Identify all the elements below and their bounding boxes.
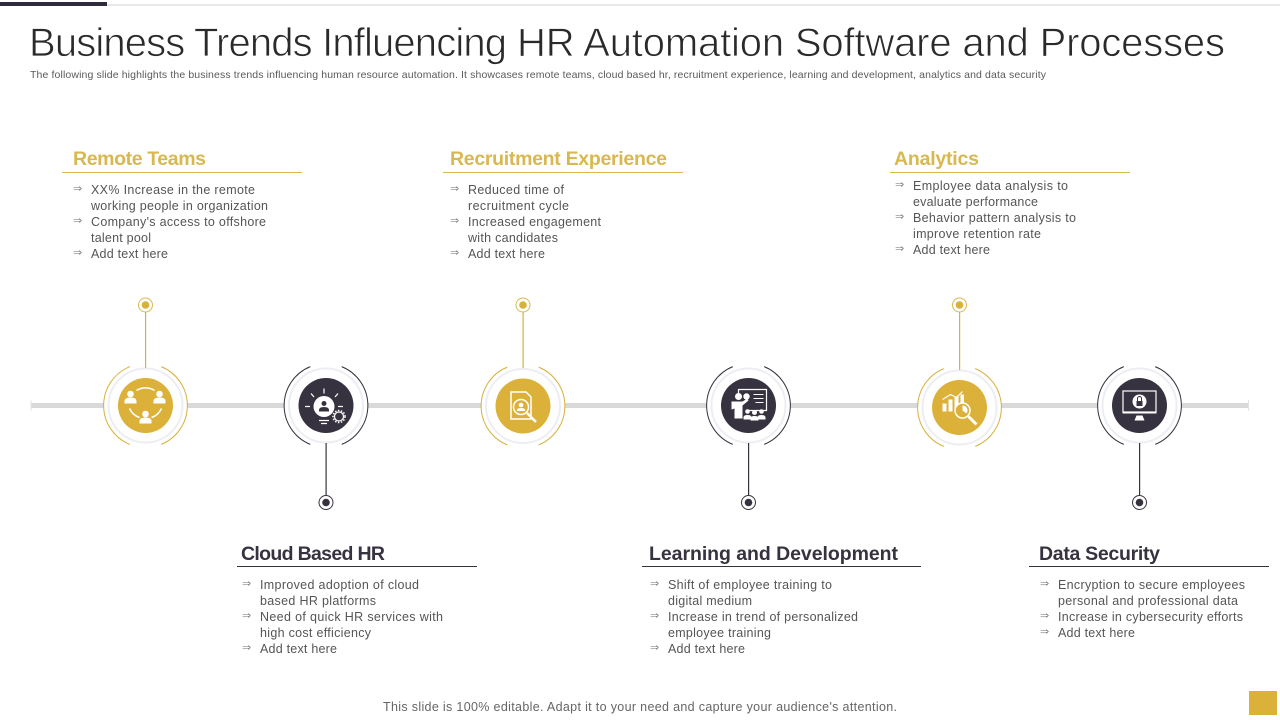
bullets: remote teams: talent pool bbox=[91, 231, 151, 245]
bullets: analytics: Behavior pattern analysis to bbox=[913, 211, 1076, 225]
bullets: cloud based hr: ⇒ bbox=[242, 641, 251, 654]
bullets: learning and development: ⇒ bbox=[650, 577, 659, 590]
bullets: analytics: Employee data analysis to bbox=[913, 179, 1068, 193]
bullets: cloud based hr: ⇒ bbox=[242, 609, 251, 622]
panel: recruitment experience bbox=[443, 148, 683, 448]
node: data security bbox=[1098, 364, 1182, 448]
footer note: This slide is 100% editable. Adapt it to your need and capture your audience's attention. bbox=[383, 700, 897, 714]
connector: analytics bbox=[952, 298, 966, 370]
heading: recruitment experience: Recruitment Experience bbox=[450, 148, 667, 170]
bullets: data security: ⇒ bbox=[1040, 577, 1049, 590]
icon: light bulb with person and gear bbox=[305, 388, 346, 424]
title: Business Trends Influencing bbox=[29, 21, 507, 65]
bullets: data security: personal and professional data bbox=[1058, 594, 1238, 608]
connector: recruitment experience bbox=[516, 298, 530, 368]
bullets: recruitment experience: Reduced time of bbox=[468, 183, 565, 197]
icon: three people in a circle bbox=[124, 388, 166, 424]
bullets: data security: Increase in cybersecurity efforts bbox=[1058, 610, 1243, 624]
bullets: recruitment experience bbox=[450, 182, 602, 261]
heading: analytics: Analytics bbox=[894, 148, 979, 170]
bullets: recruitment experience: ⇒ bbox=[450, 214, 459, 227]
connector: data security bbox=[1132, 443, 1146, 510]
panel: remote teams bbox=[62, 148, 302, 448]
connector: remote teams bbox=[138, 298, 152, 368]
bullets: cloud based hr: Need of quick HR services with bbox=[260, 610, 443, 624]
bullets: learning and development: employee training bbox=[668, 626, 771, 640]
bullets: remote teams: XX% Increase in the remote bbox=[91, 183, 255, 197]
bullets: learning and development: ⇒ bbox=[650, 609, 659, 622]
bullets: learning and development: Add text here bbox=[668, 642, 745, 656]
bullets: data security: Add text here bbox=[1058, 626, 1135, 640]
icon: monitor with padlock bbox=[1122, 391, 1156, 420]
bullets: remote teams: ⇒ bbox=[73, 214, 82, 227]
node: learning and development bbox=[706, 364, 790, 448]
panel: data security bbox=[1029, 364, 1269, 640]
bullets: cloud based hr: based HR platforms bbox=[260, 594, 376, 608]
bullets: remote teams: Add text here bbox=[91, 247, 168, 261]
heading: learning and development: Learning and Development bbox=[649, 543, 898, 565]
bullets: analytics bbox=[895, 178, 1076, 257]
bullets: remote teams: ⇒ bbox=[73, 246, 82, 259]
connector: learning and development bbox=[742, 443, 756, 510]
bullets: cloud based hr: ⇒ bbox=[242, 577, 251, 590]
timeline bar bbox=[30, 400, 1249, 411]
bullets: analytics: Add text here bbox=[913, 243, 990, 257]
bullets: remote teams: Company's access to offshore bbox=[91, 215, 266, 229]
bullets: cloud based hr bbox=[242, 577, 443, 656]
panel: analytics bbox=[890, 148, 1130, 450]
node: cloud based hr bbox=[284, 364, 368, 448]
bullets: learning and development: ⇒ bbox=[650, 641, 659, 654]
bullets: analytics: improve retention rate bbox=[913, 227, 1041, 241]
bullets: remote teams: working people in organization bbox=[90, 199, 268, 213]
bullets: cloud based hr: Improved adoption of cloud bbox=[260, 578, 419, 592]
gold corner square bbox=[1249, 691, 1277, 715]
bullets: recruitment experience: ⇒ bbox=[450, 246, 459, 259]
bullets: recruitment experience: recruitment cycle bbox=[468, 199, 569, 213]
bullets: recruitment experience: with candidates bbox=[467, 231, 558, 245]
bullets: learning and development: Increase in trend of personalized bbox=[668, 610, 858, 624]
heading: remote teams: Remote Teams bbox=[73, 148, 206, 170]
icon: chart with magnifier bbox=[942, 392, 976, 424]
subtitle: The following slide highlights the business trends influencing human resource automation. It showcases remote teams, cloud based hr, recruitment experience, learning and development, analytics and data security bbox=[30, 69, 1047, 81]
bullets: data security: ⇒ bbox=[1040, 625, 1049, 638]
bullets: remote teams: ⇒ bbox=[73, 182, 82, 195]
bullets: data security: Encryption to secure employees bbox=[1058, 578, 1245, 592]
bullets: learning and development bbox=[650, 577, 858, 656]
bullets: recruitment experience: Increased engagement bbox=[468, 215, 602, 229]
heading: data security: Data Security bbox=[1039, 543, 1160, 565]
title: HR Automation Software and Processes bbox=[517, 21, 1225, 65]
bullets: learning and development: Shift of employee training to bbox=[668, 578, 832, 592]
panel: cloud based hr bbox=[237, 364, 477, 656]
bullets: cloud based hr: Add text here bbox=[260, 642, 337, 656]
bullets: data security bbox=[1040, 577, 1245, 640]
bullets: cloud based hr: high cost efficiency bbox=[260, 626, 372, 640]
title bbox=[29, 21, 1225, 65]
node: recruitment experience bbox=[481, 364, 565, 448]
panel: learning and development bbox=[642, 364, 921, 656]
bullets: analytics: evaluate performance bbox=[913, 195, 1038, 209]
node: remote teams bbox=[104, 364, 188, 448]
bullets: analytics: ⇒ bbox=[895, 242, 904, 255]
bullets: data security: ⇒ bbox=[1040, 609, 1049, 622]
heading: cloud based hr: Cloud Based HR bbox=[241, 543, 385, 565]
bullets: recruitment experience: ⇒ bbox=[450, 182, 459, 195]
bullets: recruitment experience: Add text here bbox=[468, 247, 545, 261]
node: analytics bbox=[918, 366, 1002, 450]
icon: resume with magnifier bbox=[511, 392, 536, 422]
connector: cloud based hr bbox=[319, 443, 333, 510]
bullets: remote teams bbox=[73, 182, 268, 261]
bullets: analytics: ⇒ bbox=[895, 210, 904, 223]
icon: presenter with audience bbox=[732, 390, 766, 420]
bullets: analytics: ⇒ bbox=[895, 178, 904, 191]
bullets: learning and development: digital medium bbox=[668, 594, 752, 608]
